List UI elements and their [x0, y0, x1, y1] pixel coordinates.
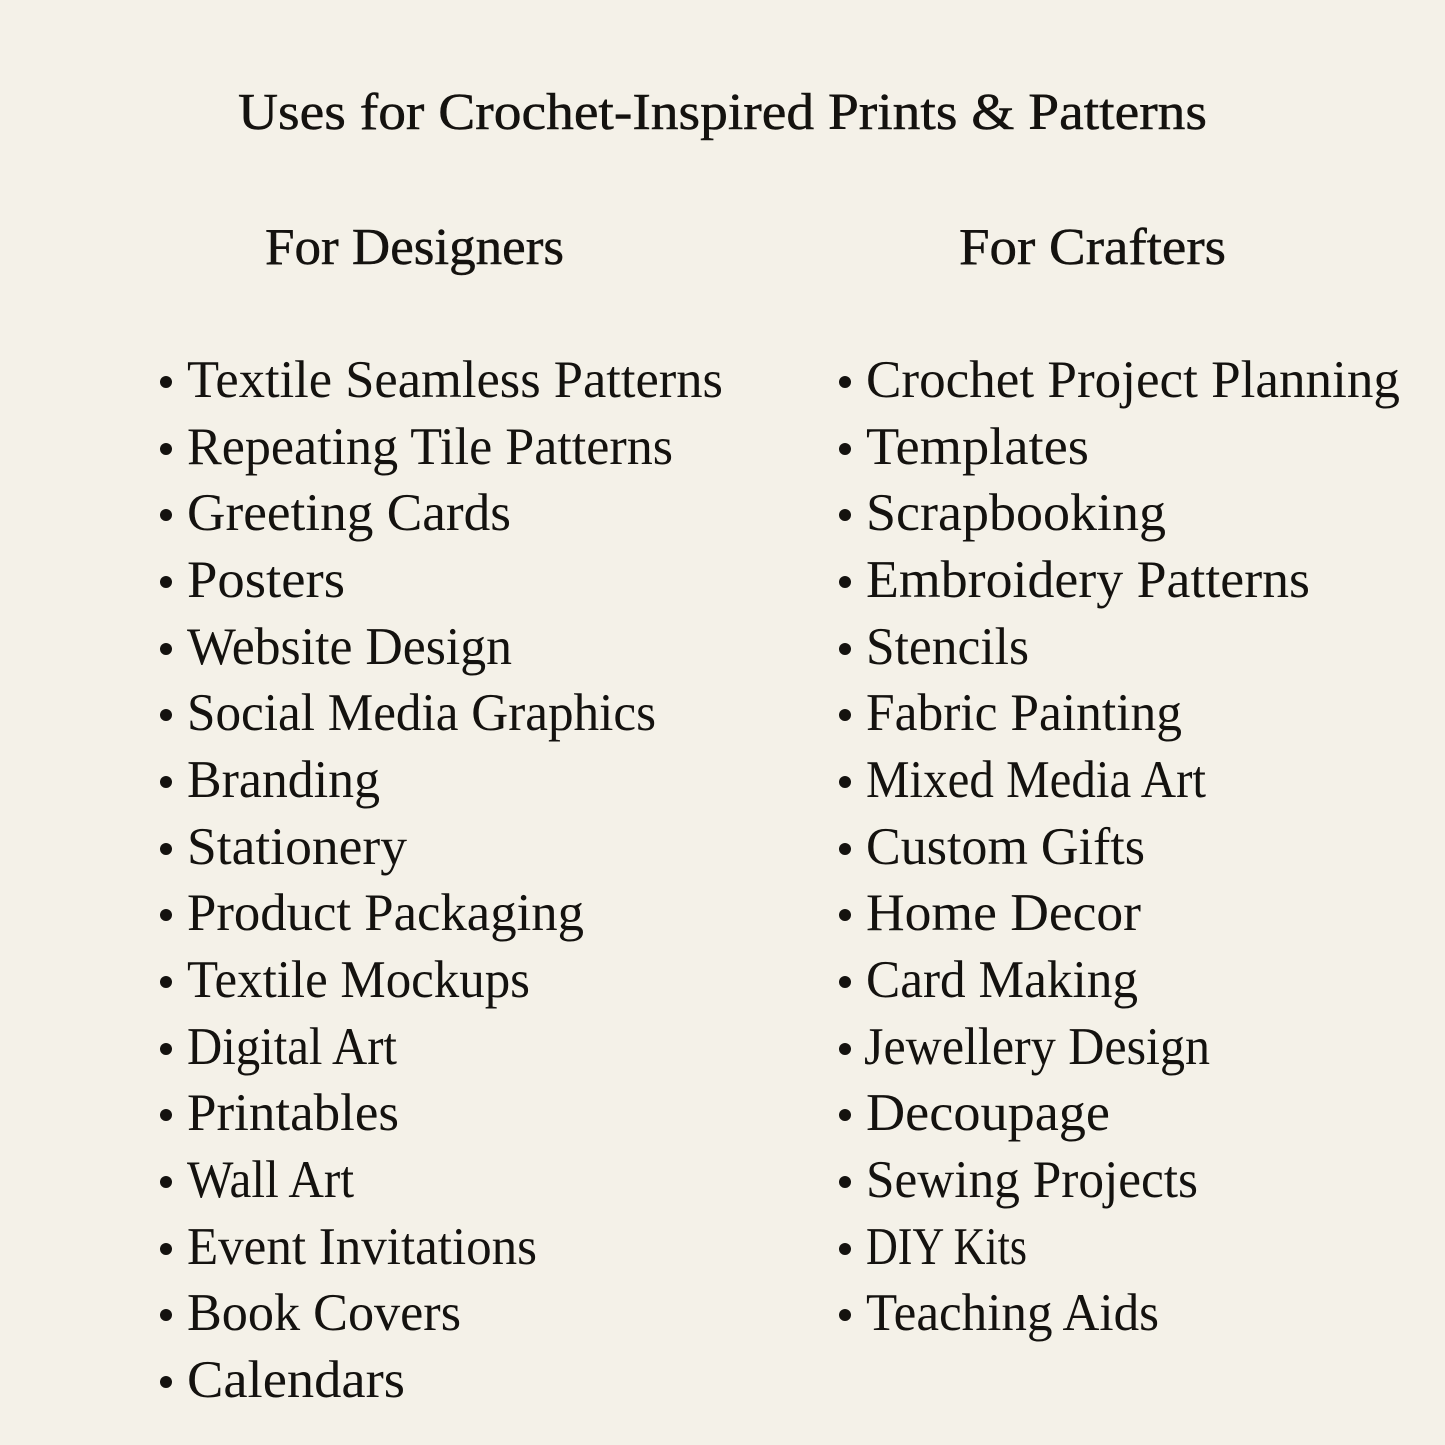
list: crafter uses: Crochet Project Planning [866, 351, 1400, 409]
panel: for designers [160, 219, 723, 1409]
list: crafter uses: Teaching Aids [866, 1284, 1159, 1342]
list: crafter uses: Templates [866, 418, 1089, 476]
list: designer uses: Wall Art [187, 1151, 354, 1209]
list: designer uses: Social Media Graphics [187, 684, 656, 742]
list: designer uses: Branding [187, 751, 380, 809]
list: designer uses: Stationery [187, 818, 407, 876]
list: crafter uses: Stencils [866, 618, 1029, 676]
list: crafter uses: Custom Gifts [866, 818, 1145, 876]
list: crafter uses: Scrapbooking [866, 484, 1166, 542]
list: crafter uses: Card Making [866, 951, 1138, 1009]
list: crafter uses: Jewellery Design [864, 1018, 1210, 1076]
list: designer uses: Repeating Tile Patterns [187, 418, 673, 476]
list: designer uses: Product Packaging [187, 884, 584, 942]
list: designer uses: Textile Mockups [187, 951, 530, 1009]
list: designer uses [160, 351, 723, 1409]
list: crafter uses: DIY Kits [866, 1218, 1027, 1276]
list: designer uses: Posters [187, 551, 345, 609]
list: designer uses: Event Invitations [187, 1218, 537, 1276]
panel: for crafters [839, 219, 1400, 1342]
list: designer uses: Calendars [187, 1351, 405, 1409]
title: Uses for Crochet-Inspired Prints & Patterns [238, 84, 1207, 141]
list: designer uses: Website Design [187, 618, 512, 676]
list: designer uses: Printables [187, 1084, 399, 1142]
list: crafter uses: Embroidery Patterns [866, 551, 1310, 609]
list: designer uses: Digital Art [187, 1018, 397, 1076]
list: designer uses: Book Covers [187, 1284, 461, 1342]
list: designer uses: Greeting Cards [187, 484, 511, 542]
list: crafter uses: Fabric Painting [866, 684, 1182, 742]
list: crafter uses: Sewing Projects [866, 1151, 1198, 1209]
list: crafter uses: Mixed Media Art [866, 751, 1206, 809]
heading: for designers: For Designers [265, 219, 564, 276]
list: designer uses: Textile Seamless Patterns [187, 351, 723, 409]
list: crafter uses: Decoupage [866, 1084, 1110, 1142]
heading: for crafters: For Crafters [959, 219, 1226, 276]
list: crafter uses [839, 351, 1400, 1342]
list: crafter uses: Home Decor [866, 884, 1141, 942]
